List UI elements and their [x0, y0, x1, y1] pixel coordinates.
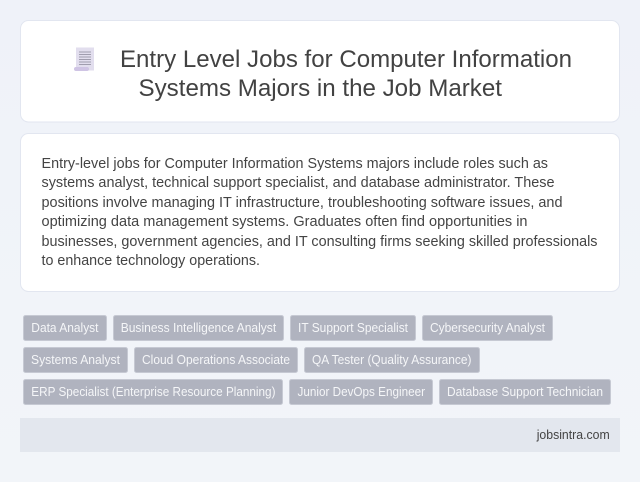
text block: description: businesses, government agencies, and IT consulting firms seeking skilled professionals [42, 234, 598, 250]
text block: description: optimizing data management systems. Graduates often find opportunities in [42, 214, 528, 230]
tag: Cybersecurity Analyst [422, 316, 552, 340]
footer [20, 418, 620, 452]
tag: Systems Analyst [24, 348, 128, 372]
text block: description: positions involve managing IT infrastructure, troubleshooting software issues, and [42, 195, 562, 211]
tag: Cloud Operations Associate: Cloud Operations Associate [142, 352, 290, 367]
title: Entry Level Jobs for Computer Information [120, 46, 572, 73]
tag: Cybersecurity Analyst: Cybersecurity Analyst [430, 320, 545, 335]
title: Systems Majors in the Job Market [138, 75, 502, 102]
tag: Business Intelligence Analyst [114, 316, 284, 340]
tag: Database Support Technician [440, 380, 610, 404]
text block: description: systems analyst, technical support specialist, and database administrator. These [42, 175, 554, 191]
tag: IT Support Specialist: IT Support Specialist [298, 320, 408, 335]
tag: IT Support Specialist [290, 316, 416, 340]
text block: description [42, 156, 598, 269]
tag: ERP Specialist [24, 380, 282, 404]
tag: Database Support Technician: Database Support Technician [447, 384, 603, 399]
tag: Data Analyst [24, 316, 106, 340]
tag: Cloud Operations Associate [134, 348, 298, 372]
text block: description: to enhance technology operations. [42, 253, 260, 269]
tag: ERP Specialist: ERP Specialist (Enterprise Resource Planning) [31, 384, 275, 399]
tag: QA Tester [304, 348, 480, 372]
footer source: jobsintra.com [536, 427, 610, 442]
tag: QA Tester: QA Tester (Quality Assurance) [312, 352, 472, 367]
panel: header [20, 20, 620, 122]
panel: description [20, 134, 620, 292]
tag: Business Intelligence Analyst: Business Intelligence Analyst [121, 320, 277, 335]
text block: description: Entry-level jobs for Computer Information Systems majors include roles such as [42, 156, 548, 172]
tags: job titles [24, 316, 610, 404]
tag: Data Analyst: Data Analyst [31, 320, 99, 335]
tag: Junior DevOps Engineer: Junior DevOps Engineer [298, 384, 426, 399]
title [120, 46, 572, 102]
tag: Junior DevOps Engineer [290, 380, 432, 404]
tag: Systems Analyst: Systems Analyst [31, 352, 120, 367]
icon: document scroll [74, 48, 94, 71]
